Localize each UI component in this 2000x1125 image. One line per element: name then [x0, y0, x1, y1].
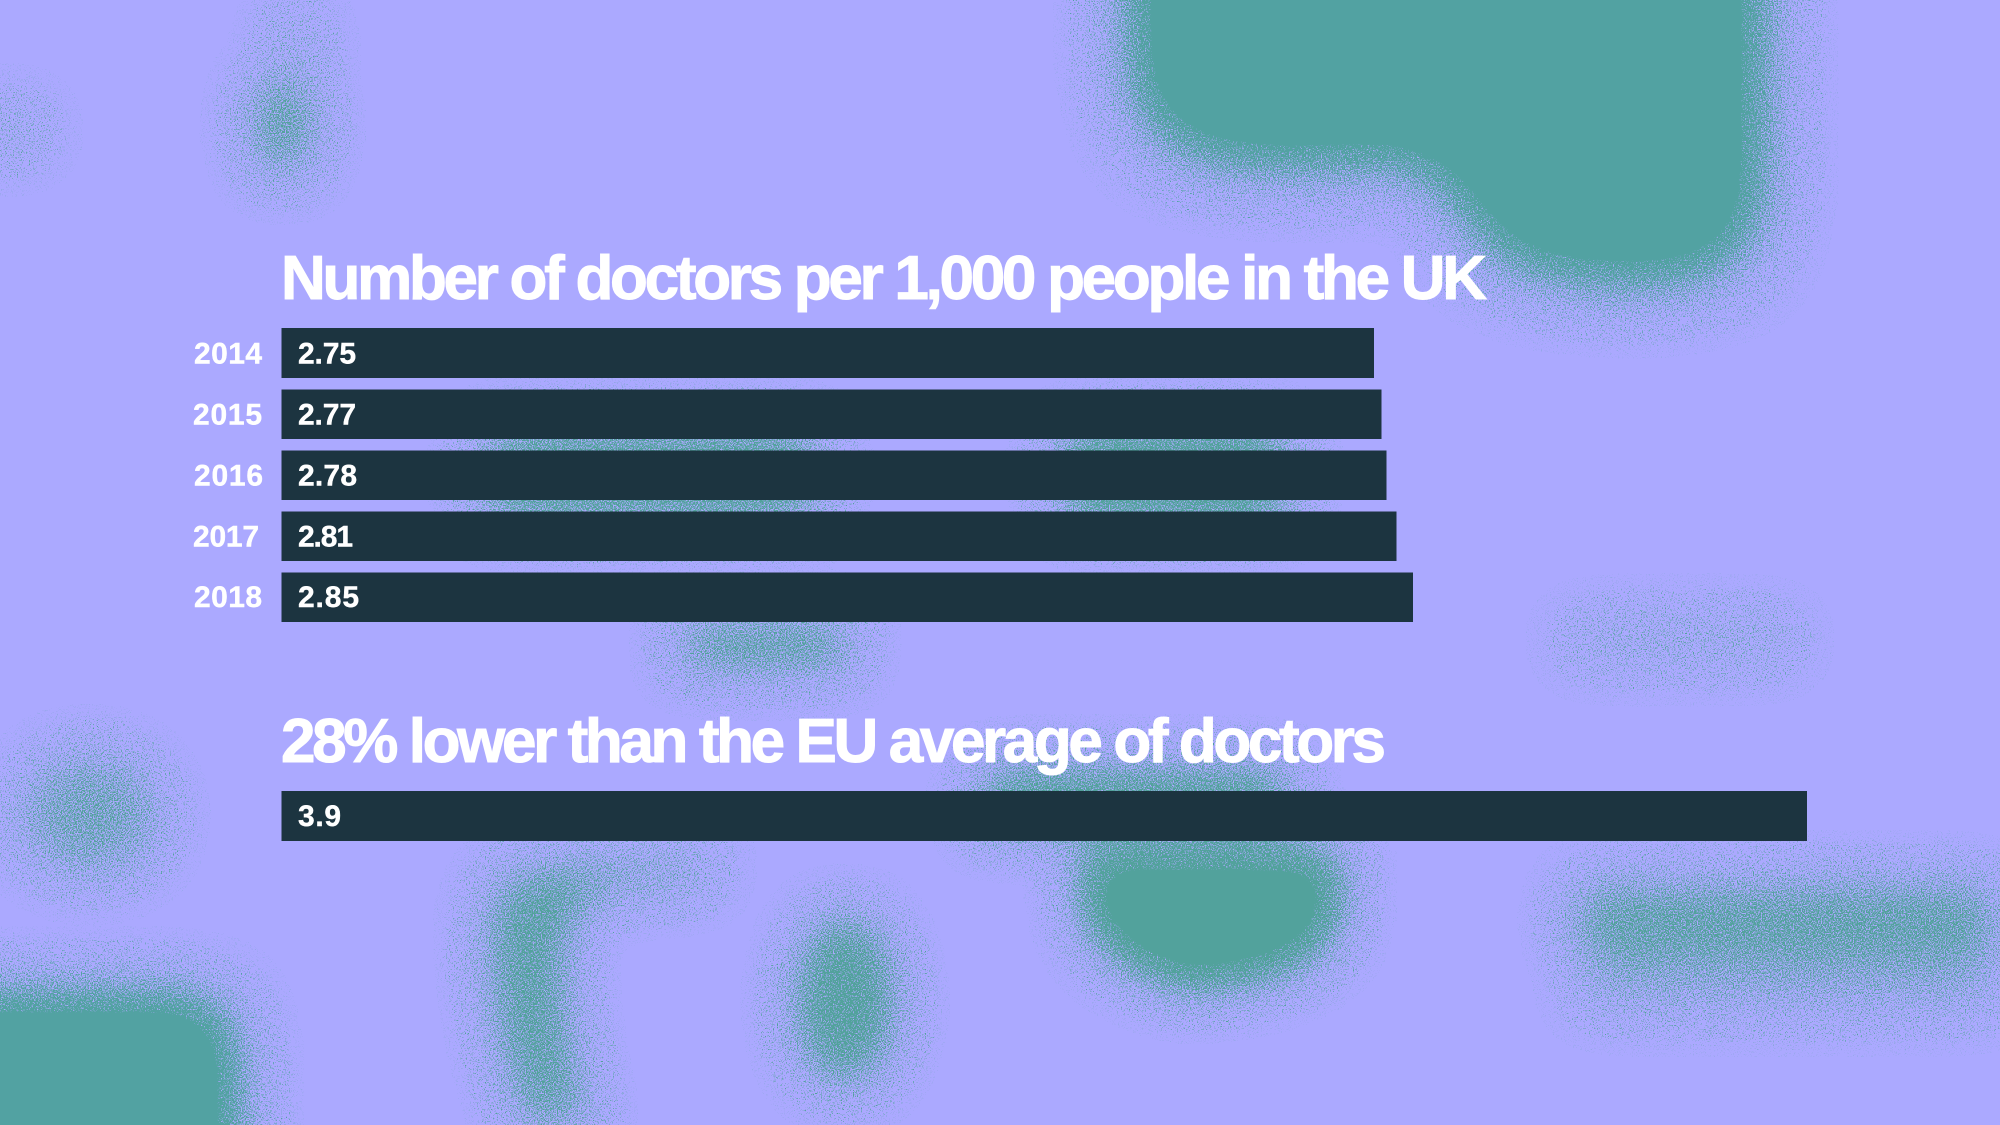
- bar 2017: 2.81: [298, 520, 353, 554]
- bar 2016: [194, 450, 1386, 500]
- solid grainy blob: bottom left: [0, 898, 232, 1125]
- bar 2015: 2015: [193, 398, 262, 432]
- bar 2015: [193, 390, 1382, 439]
- bar 2015: 2.77: [298, 398, 356, 432]
- bar 2018: [194, 572, 1413, 622]
- solid grainy blob: top right: [1135, 0, 1757, 278]
- bar 2014: [194, 328, 1374, 378]
- bar 2014: 2014: [194, 338, 262, 370]
- bar: EU average 3.9: [282, 791, 1807, 841]
- bar: EU average 3.9: 3.9: [298, 800, 341, 833]
- bar 2014: 2.75: [298, 338, 356, 370]
- heading: EU comparison: 28% lower than the EU average of doctors: [281, 707, 1386, 776]
- bar 2016: 2.78: [298, 460, 357, 492]
- bar 2018: 2018: [194, 581, 262, 614]
- bar chart: UK doctors 2014 to 2018: [193, 328, 1413, 622]
- heading: doctors per 1,000 people: Number of doctors per 1,000 people in the UK: [281, 244, 1487, 313]
- bar 2016: 2016: [194, 460, 263, 492]
- bar 2018: 2.85: [298, 581, 359, 614]
- bar 2017: [193, 512, 1396, 561]
- bar 2017: 2017: [193, 520, 259, 554]
